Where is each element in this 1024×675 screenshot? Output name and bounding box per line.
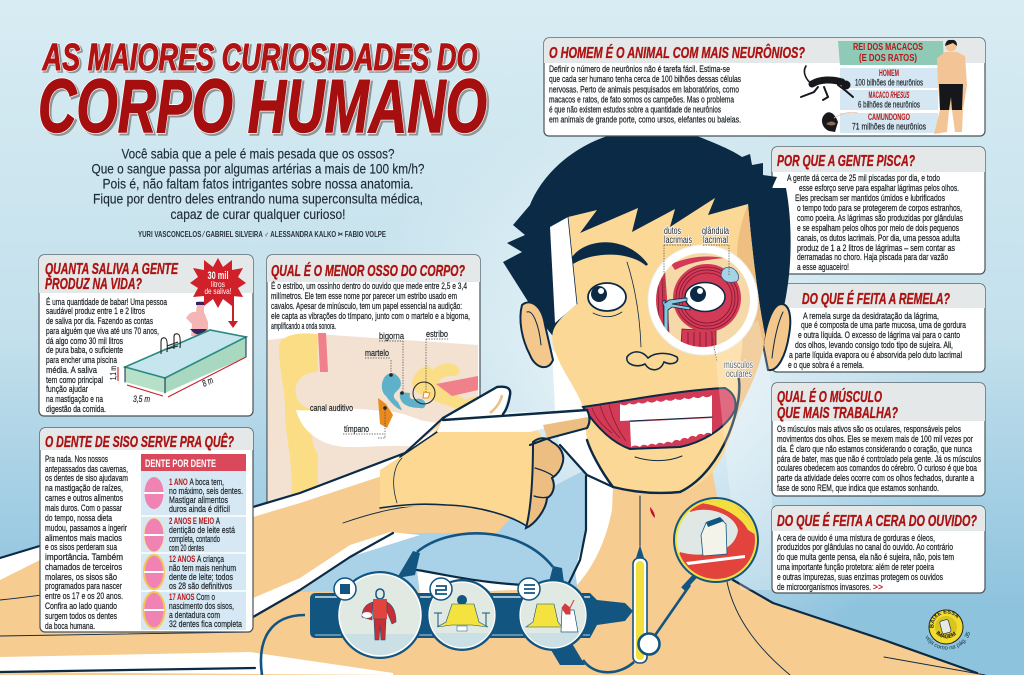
text: pisca: Eles precisam ser mantidos úmidos e lubrificados: [795, 193, 945, 204]
text: menor osso: milímetros. Ele tem esse nome por parecer um estribo usado em: [271, 291, 457, 302]
title: [38, 37, 489, 150]
text: pisca: a esse aguaceiro!: [797, 262, 849, 273]
text: pisca: o tempo todo para se protegerem de corpos estranhos,: [797, 203, 962, 214]
text: neurônios: que cada ser humano tenha cerca de 100 bilhões dessas células: [549, 74, 741, 85]
text: saliva: na mastigação e na: [46, 394, 103, 405]
text: siso: surgem todos os dentes: [45, 611, 117, 622]
intro text: Você sabia que a pele é mais pesada que os ossos?: [122, 146, 395, 162]
left ear: [520, 302, 553, 367]
hair: [503, 129, 791, 345]
text: remela: e outra líquida. O excesso de lágrima vai para o canto: [798, 330, 960, 341]
text: menor osso: amplificando a onda sonora.: [271, 321, 336, 332]
dimension arrows: [118, 357, 246, 397]
nose: [627, 352, 678, 370]
heading: neurônios: O HOMEM É O ANIMAL COM MAIS NEURÔNIOS?: [549, 44, 805, 62]
text: saliva: de saliva por dia. Fazendo as contas: [46, 316, 153, 327]
badge: baixe essa imagem: BAIXE ESSA: [930, 610, 959, 628]
text: siso: [45, 454, 128, 632]
heading: menor osso: QUAL É O MENOR OSSO DO CORPO?: [271, 263, 465, 280]
panel: quanta saliva a gente produz na vida: [39, 255, 253, 416]
text: cera: uma importante função protetora: além de reter poeira: [777, 562, 934, 573]
text: siso: os dentes de siso ajudavam: [45, 473, 128, 484]
panel: o homem é o animal com mais neurônios: [544, 38, 985, 136]
text: pisca: canais, os dutos lacrimais. Por dia, uma pessoa adulta: [797, 233, 961, 244]
text: siso: do tempo, nossa dieta: [45, 513, 113, 524]
row: 17 anos: 17 ANOS Com o: [169, 592, 215, 603]
capsule: astronaut: [336, 571, 424, 660]
text: cera: de microorganismos invasores.: [777, 582, 871, 593]
heading: remela: DO QUE É FEITA A REMELA?: [802, 291, 950, 308]
text: neurônios: nervosas. Perto de animais pesquisados em laboratórios, como: [549, 84, 739, 96]
label: músculos oculares: oculares: [726, 369, 752, 380]
text: pisca: e se espalham pelos olhos por meio de dois pequenos: [797, 223, 959, 234]
icon: mouse: [822, 112, 858, 132]
text: remela: a parte líquida evapora ou é absorvida pelo duto lacrimal: [789, 350, 962, 361]
diagram: anatomy of the ear: [268, 329, 485, 510]
title line 1: [42, 37, 480, 80]
title line 1: AS MAIORES CURIOSIDADES DO: [42, 37, 478, 79]
label: glândula lacrimal: lacrimal: [703, 235, 728, 246]
text: pisca: como poeira. As lágrimas são produzidas por glândulas: [797, 213, 963, 224]
label: estribo: estribo: [426, 329, 448, 340]
text: siso: da boca humana.: [45, 621, 95, 632]
row: homem: HOMEM: [879, 68, 899, 78]
panel: do que é feita a remela: [772, 284, 985, 372]
heading: saliva: PRODUZ NA VIDA?: [45, 276, 142, 293]
thumb and sleeve: [437, 387, 589, 432]
panel: qual é o menor osso do corpo: [267, 255, 485, 515]
text: siso: mudou, passamos a ingerir: [45, 523, 127, 534]
row: 2 anos e meio: com 20 dentes: [169, 543, 204, 554]
row: 2 anos e meio: [144, 516, 236, 554]
text: siso: e os sisos perderam sua: [45, 542, 117, 553]
text: saliva: tem como principal: [46, 375, 103, 386]
text: músculo: [777, 424, 981, 494]
text: saliva: digestão da comida.: [46, 404, 106, 415]
row: 17 anos: nascimento dos sisos,: [169, 601, 234, 612]
row: 1 ano: no máximo, seis dentes.: [169, 486, 243, 497]
text: saliva: dá algo como 30 mil litros: [46, 336, 123, 347]
badge: baixe essa imagem: IMAGEM: [936, 630, 956, 638]
text: músculo: fase de sono REM, que indica que estamos sonhando.: [777, 483, 939, 494]
text: cera: [777, 533, 954, 593]
text: siso: importância. Também: [45, 552, 123, 563]
text: menor osso: [271, 281, 470, 332]
illustration: hand: [380, 387, 590, 528]
text: siso: programados para nascer: [45, 581, 122, 592]
intro text: [92, 146, 425, 222]
table: dente por dente: [141, 454, 246, 630]
row: macaco rhesus: [840, 90, 938, 110]
label: 1,1 m: 1,1 m: [109, 366, 118, 380]
text: remela: e o que sobra é a remela.: [788, 360, 864, 371]
white coat: [552, 350, 620, 585]
text: cera: A cera de ouvido é uma mistura de gorduras e óleos,: [777, 533, 935, 544]
row: 17 anos: [144, 592, 243, 630]
text: siso: carnes e outros alimentos: [45, 493, 123, 504]
label: martelo: martelo: [365, 348, 389, 359]
label: 8 m: 8 m: [201, 375, 215, 390]
row: 1 ano: 1 ANO A boca tem,: [169, 477, 224, 488]
text: saliva: de pura baba, o suficiente: [46, 345, 123, 356]
label: músculos oculares: músculos: [724, 360, 753, 371]
cables: [261, 533, 690, 675]
text: menor osso: cavalos. Apesar de minúsculo, tem um papel essencial na audição:: [271, 301, 462, 312]
text: siso: entre os 17 e os 20 anos.: [45, 591, 123, 602]
label: 3,5 m: 3,5 m: [133, 394, 150, 405]
magnifier: eye muscles: [648, 245, 758, 360]
text: neurônios: macacos e ratos, de fato somos os campeões. Mas o problema: [549, 94, 734, 106]
icon: monkey: [801, 66, 853, 100]
pool: [125, 367, 165, 393]
right ear: [763, 304, 790, 370]
face: [552, 198, 765, 493]
heading: pisca: POR QUE A GENTE PISCA?: [777, 153, 915, 170]
text: remela: [788, 311, 966, 371]
text: pisca: A gente dá cerca de 25 mil piscadas por dia, e todo: [787, 173, 940, 184]
chart heading: REI DOS MACACOS: [853, 41, 923, 53]
heading: músculo: QUE MAIS TRABALHA?: [777, 405, 898, 422]
text: cera: e outras impurezas, suas enzimas protegem os ouvidos: [777, 572, 943, 583]
heading: saliva: QUANTA SALIVA A GENTE: [45, 261, 178, 278]
row: macaco rhesus: MACACO RHESUS: [868, 90, 910, 100]
title line 2: CORPO HUMANO: [38, 64, 487, 148]
text: cera: do que muita gente pensa, ela não é sujeira, não, pois tem: [777, 552, 954, 563]
panel: qual é o músculo que mais trabalha: [772, 383, 985, 496]
callout: 30 mil litros de saliva: litros: [211, 280, 225, 289]
text: siso: Pra nada. Nos nossos: [45, 454, 108, 465]
panel: o dente de siso serve pra quê: [40, 428, 253, 632]
illustration: head: [503, 129, 791, 590]
panel: por que a gente pisca: [772, 147, 985, 274]
title line 2: CORPO HUMANO: [40, 66, 489, 150]
light beam: [715, 320, 772, 590]
finger: curled: [526, 438, 563, 528]
text: cera: >>: [873, 582, 883, 593]
skin: torso and arm: [0, 418, 985, 675]
heading: saliva: [45, 261, 178, 293]
text: siso: alimentos mais macios: [45, 533, 122, 544]
left eye: [588, 283, 626, 317]
text: siso: Confira ao lado quando: [45, 601, 117, 612]
row: 12 anos: os 28 são definitivos: [169, 581, 232, 592]
intro text: capaz de curar qualquer curioso!: [170, 206, 346, 222]
row: camundongo: [840, 112, 938, 133]
swimmer: [186, 301, 208, 336]
label: glândula lacrimal: [702, 226, 729, 246]
row: homem: [840, 68, 938, 88]
text: menor osso: É o estribo, um ossinho dentro do ouvido que mede entre 2,5 e 3,4: [271, 281, 467, 292]
text: siso: antepassados das cavernas,: [45, 464, 128, 475]
label: dutos lacrimais: lacrimais: [664, 235, 692, 246]
chart: rei dos macacos: [801, 40, 967, 134]
title line 2: CORPO HUMANO: [38, 64, 487, 148]
row: 2 anos e meio: dentição de leite está: [169, 525, 236, 536]
label: glândula lacrimal: glândula: [702, 226, 729, 237]
intro text: Pois é, não faltam fatos intrigantes sobre nossa anatomia.: [102, 176, 414, 192]
label: músculos oculares: [724, 360, 753, 380]
row: 2 anos e meio: completa, contando: [169, 534, 220, 545]
label: dutos lacrimais: dutos: [664, 226, 681, 237]
text: saliva: função ajudar: [46, 384, 88, 395]
row: 1 ano: Mastigar alimentos: [169, 495, 228, 506]
text: saliva: para encher uma piscina: [46, 355, 117, 366]
text: pisca: [787, 173, 963, 273]
illustration: swimming pool: [109, 301, 246, 405]
text: siso: na mastigação de raízes,: [45, 483, 123, 494]
text: pisca: produz de 1 a 2 litros de lágrimas – sem contar as: [797, 243, 955, 254]
numbered badges: [334, 578, 540, 600]
white hair highlight: [550, 217, 577, 323]
callout: 30 mil litros de saliva: 30 mil: [208, 270, 228, 282]
row: 12 anos: [144, 554, 236, 592]
syringe: yellow thermometer: [633, 545, 660, 663]
text: neurônios: [549, 64, 741, 126]
table heading: [141, 454, 246, 471]
intro text: Fique por dentro deles entrando numa superconsulta médica,: [93, 190, 423, 206]
text: saliva: para alguém que viva até uns 70 anos,: [46, 326, 159, 337]
text: neurônios: é que não existem estudos sobre a quantidade de neurônios: [549, 104, 721, 116]
credits: YURI VASCONCELOS ⁄ GABRIEL SILVEIRA ♂ ALESSANDRA KALKO ✂ FABIO VOLPE: [138, 230, 387, 239]
heading: siso: O DENTE DE SISO SERVE PRA QUÊ?: [45, 433, 234, 451]
row: 12 anos: não tem mais nenhum: [169, 563, 236, 574]
device: diagnostic machine: [261, 498, 760, 675]
mouth: [583, 388, 736, 449]
chart heading: [838, 41, 944, 65]
text: saliva: média. A saliva: [46, 365, 98, 376]
row: 17 anos: 32 dentes fica completa: [169, 619, 243, 630]
row: 17 anos: a dentadura com: [169, 610, 220, 621]
badge: baixe essa imagem: [926, 610, 970, 650]
title line 1: AS MAIORES CURIOSIDADES DO: [44, 38, 480, 80]
text: saliva: É uma quantidade de babar! Uma pessoa: [46, 297, 167, 308]
illustration: body and arm: [0, 350, 985, 675]
table heading: DENTE POR DENTE: [145, 458, 216, 470]
row: 1 ano: [144, 477, 243, 515]
panel: do que é feita a cera do ouvido: [772, 506, 985, 593]
sleeve bands: [0, 425, 440, 580]
capsule: lander and astronaut: [517, 579, 589, 651]
eyebrow: [573, 243, 647, 265]
row: 1 ano: duros ainda é difícil: [169, 504, 230, 515]
machine bar: [310, 593, 633, 638]
text: saliva: [46, 297, 167, 415]
label: dutos lacrimais: [664, 226, 692, 246]
row: camundongo: 71 milhões de neurônios: [852, 122, 926, 132]
row: 2 anos e meio: 2 ANOS E MEIO A: [169, 516, 220, 527]
label: tímpano: tímpano: [344, 424, 369, 435]
text: siso: mais duros. Com o passar: [45, 503, 122, 514]
text: cera: produzidos por glândulas no canal do ouvido. Ao contrário: [777, 542, 953, 553]
title line 1: AS MAIORES CURIOSIDADES DO: [42, 37, 478, 79]
text: remela: dos olhos, levando consigo todo tipo de sujeira. Ali,: [795, 340, 953, 351]
label: bigorna: bigorna: [379, 331, 405, 342]
row: 12 anos: dente de leite; todos: [169, 572, 233, 583]
callout: 30 mil litros de saliva: de saliva!: [204, 287, 232, 296]
badge: baixe essa imagem: veja como na pág. 35: [926, 632, 970, 650]
text: pisca: derramadas no choro. Haja piscada para dar vazão: [797, 252, 948, 263]
heading: músculo: [777, 388, 898, 422]
magnifier: astronaut face: [674, 498, 760, 589]
heading: músculo: QUAL É O MÚSCULO: [777, 388, 882, 406]
icon: man: [934, 40, 967, 134]
callout: 30 mil litros de saliva: [190, 258, 246, 328]
row: homem: 100 bilhões de neurônios: [855, 78, 923, 88]
jaw outline: [587, 375, 739, 493]
text: neurônios: Definir o número de neurônios não é tarefa fácil. Estima-se: [549, 64, 730, 75]
row: macaco rhesus: 6 bilhões de neurônios: [858, 100, 920, 110]
text: saliva: saudável produz entre 1 e 2 litros: [46, 306, 145, 317]
intro text: Que o sangue passa por algumas artérias a mais de 100 km/h?: [92, 160, 425, 176]
outlines: [0, 418, 977, 673]
text: siso: molares, os sisos são: [45, 572, 117, 583]
capsule: lander: [426, 579, 498, 651]
text: neurônios: em animais de grande porte, como ursos, elefantes ou baleias.: [549, 114, 741, 126]
blue gap under arm: [300, 470, 586, 592]
neck drop of blood: [650, 507, 655, 518]
index finger: [543, 417, 589, 438]
text: siso: chamados de terceiros: [45, 562, 122, 573]
text: remela: A remela surge da desidratação da lágrima,: [803, 311, 939, 322]
row: camundongo: CAMUNDONGO: [868, 112, 910, 122]
chart heading: (E DOS RATOS): [859, 52, 917, 64]
ladder: [161, 334, 180, 354]
row: 12 anos: 12 ANOS A criança: [169, 554, 224, 565]
text: menor osso: ele capta as vibrações do tímpano, junto com o martelo e a bigorna,: [271, 311, 470, 322]
label: canal auditivo: canal auditivo: [310, 403, 353, 414]
